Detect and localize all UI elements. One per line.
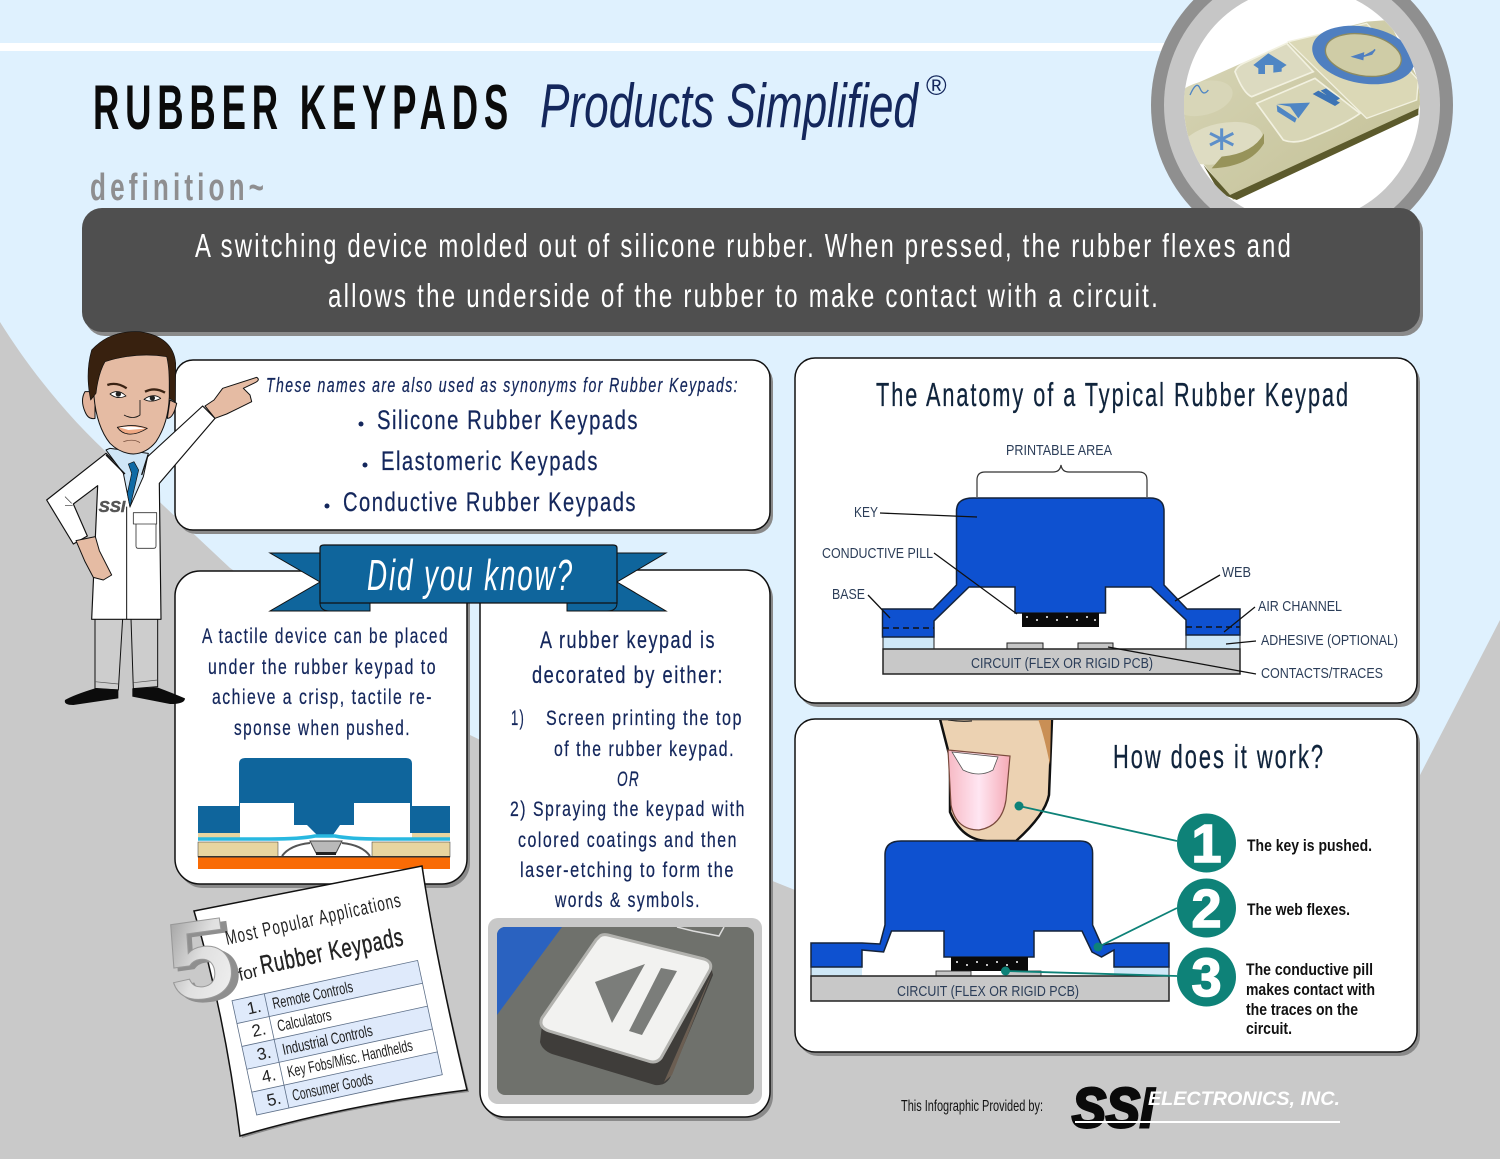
step 2: 2 [1191,879,1222,939]
anatomy cross-section [882,498,1240,674]
applications table: 3. [255,1043,273,1064]
applications table [232,960,442,1115]
anatomy labels and leaders: BASE [832,586,865,603]
big number five: 5 [159,893,241,1026]
shoes [65,687,185,705]
definition banner [82,208,1423,336]
how cross-section [811,841,1169,1001]
panel: decoration methods: 1) [511,707,525,730]
panel: decoration methods: laser-etching to form the [520,859,735,882]
anatomy labels and leaders: CONDUCTIVE PILL [822,545,933,562]
step 3: The conductive pill [1246,960,1373,979]
step 3: the traces on the [1246,1000,1358,1019]
anatomy labels and leaders: WEB [1222,564,1251,581]
step 3: 3 [1191,948,1222,1008]
step 3: circuit. [1246,1019,1292,1038]
note heading: Most Popular Applications [223,889,404,950]
panel: synonyms: These names are also used as synonyms for Rubber Keypads: [266,375,739,397]
anatomy labels and leaders: ADHESIVE (OPTIONAL) [1261,632,1398,649]
title: Rubber Keypads: RUBBER KEYPADS [93,73,514,143]
character: scientist in lab coat pointing [47,332,258,705]
subtitle: Products Simplified: Products Simplified [540,72,920,141]
step 2 [1177,878,1350,939]
step 2: The web flexes. [1247,900,1350,919]
step 1 [1177,814,1372,874]
applications table: 5. [265,1089,283,1110]
logo: SSI Electronics [1072,1076,1340,1139]
panel: decoration methods [480,570,773,1121]
step callouts [1001,802,1375,1038]
panel: decoration methods: decorated by either: [532,662,724,689]
tactile dome diagram [198,758,450,869]
panel: tactile device: sponse when pushed. [234,717,411,740]
lab coat [47,406,215,619]
applications table: Industrial Controls [281,1023,374,1059]
step 1: 1 [1191,814,1222,874]
panel: decoration methods: Screen printing the top [546,707,743,730]
anatomy labels and leaders: KEY [854,504,878,521]
panel: decoration methods: OR [617,768,640,791]
pocket [133,513,157,548]
anatomy labels and leaders: CONTACTS/TRACES [1261,665,1383,682]
panel: synonyms [175,360,773,534]
pointing hand [205,377,258,418]
legs [95,618,158,690]
panel: tactile device: under the rubber keypad to [208,656,437,679]
definition banner: allows the underside of the rubber to make contact with a circuit. [328,277,1160,314]
panel: synonyms: Conductive Rubber Keypads [343,487,637,517]
applications table: Key Fobs/Misc. Handhelds [286,1038,414,1081]
panel: synonyms: Silicone Rubber Keypads [377,405,639,435]
step 3 [1177,948,1375,1038]
panel: decoration methods: 2) Spraying the keypad with [510,798,746,821]
banner: Did you know: Did you know? [367,551,574,600]
applications table: Consumer Goods [291,1071,374,1105]
logo: SSI Electronics: ELECTRONICS, INC. [1148,1089,1340,1110]
panel: tactile device: achieve a crisp, tactile re- [212,686,433,709]
circular keypad photo [1151,0,1453,211]
panel: tactile device [175,571,470,888]
how heading: How does it work? [1113,738,1325,775]
panel: decoration methods: words & symbols. [554,889,701,912]
panel: tactile device: A tactile device can be placed [202,625,449,648]
photo: key with play-pause icon [488,918,762,1104]
panel: synonyms: Elastomeric Keypads [381,446,599,476]
step 1: The key is pushed. [1247,836,1372,855]
banner: Did you know [270,545,666,611]
hand on hip [76,537,112,580]
anatomy cross-section: CIRCUIT (FLEX OR RIGID PCB) [971,655,1153,672]
note heading: Rubber Keypads [257,921,406,980]
panel: decoration methods: colored coatings and then [518,829,738,852]
anatomy labels and leaders: AIR CHANNEL [1258,598,1342,615]
panel: anatomy of a keypad [795,358,1420,707]
coat logo: SSI [99,499,126,516]
panel: how does it work [795,719,1420,1056]
collar and tie [106,448,148,507]
note: 5 most popular applications [159,866,469,1138]
applications table: 4. [260,1065,278,1087]
icon: pressing finger [940,719,1052,841]
note heading: for [236,961,260,985]
big number five: 5 [162,896,249,1030]
panel: decoration methods: A rubber keypad is [540,627,716,654]
step 3: makes contact with [1246,980,1375,999]
applications table: 1. [245,997,263,1018]
how cross-section: CIRCUIT (FLEX OR RIGID PCB) [897,983,1079,1000]
note heading [223,889,406,985]
anatomy labels and leaders: PRINTABLE AREA [1006,442,1112,459]
registered mark: ® [926,70,947,101]
applications table: Calculators [276,1007,333,1035]
panel: decoration methods: of the rubber keypad. [554,738,735,761]
applications table: Remote Controls [271,979,355,1013]
head [82,332,177,454]
footer credit: This Infographic Provided by: [901,1098,1043,1115]
applications table: 2. [250,1019,268,1041]
logo: SSI Electronics: SSI [1072,1076,1155,1139]
anatomy labels and leaders [822,442,1398,682]
heading: definition: definition~ [90,167,268,209]
